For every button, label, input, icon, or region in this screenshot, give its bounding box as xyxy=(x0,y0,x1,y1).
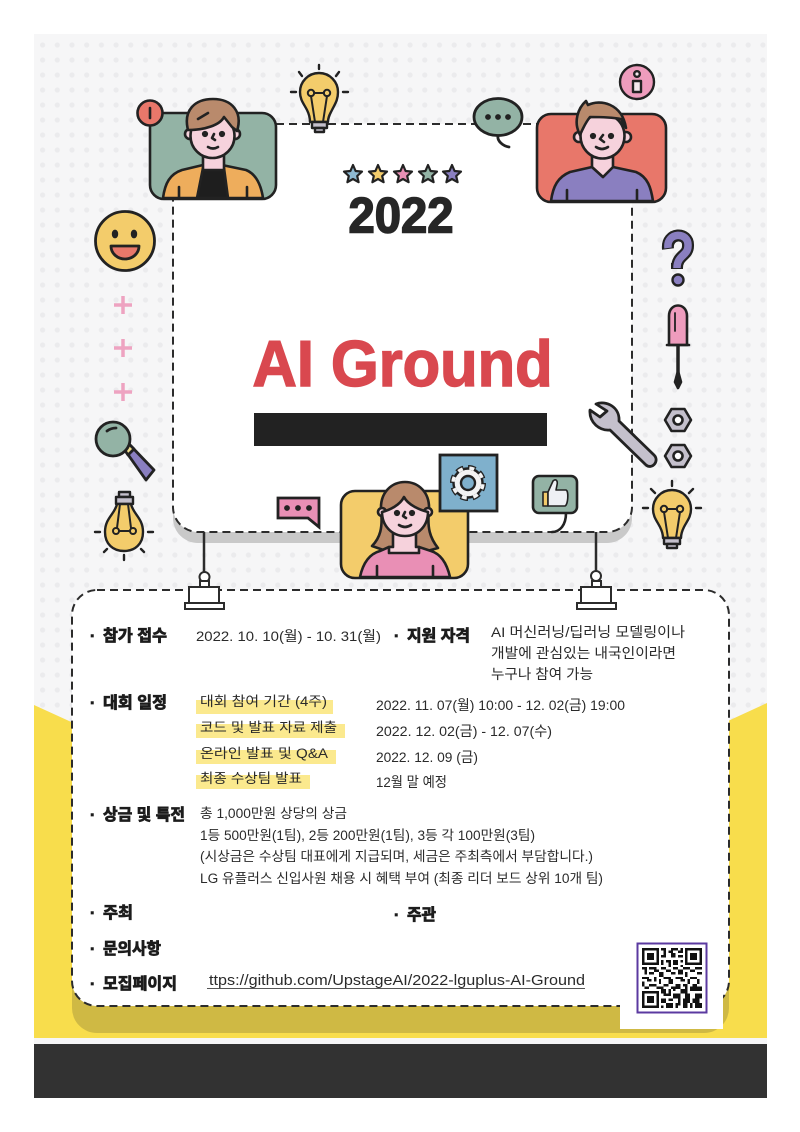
section: host: 주최 xyxy=(103,904,133,922)
section: prizes: · xyxy=(90,807,95,824)
icon: pink speech box xyxy=(278,498,319,527)
icon: question mark xyxy=(668,235,688,286)
icon: alert badge xyxy=(138,100,162,126)
section: eligibility xyxy=(394,624,685,682)
section: recruiting page xyxy=(90,972,585,993)
title: AI Ground xyxy=(252,328,553,400)
person: woman in pink xyxy=(341,482,468,578)
section: schedule: 코드 및 발표 자료 제출 xyxy=(200,720,337,735)
yellow background shape xyxy=(34,703,767,1038)
icon: smiley xyxy=(96,212,154,270)
section: schedule: 2022. 12. 02(금) - 12. 07(수) xyxy=(376,723,552,739)
icon: hex nuts xyxy=(665,409,691,467)
icons: pink plus signs xyxy=(114,296,132,401)
section: registration period: · xyxy=(90,628,95,645)
section: prizes: 총 1,000만원 상당의 상금 xyxy=(200,806,347,821)
section: recruiting page: 모집페이지 xyxy=(103,975,177,993)
clip: left hanger xyxy=(185,532,224,609)
redacted black bar xyxy=(254,413,547,446)
section: host: · xyxy=(90,905,95,922)
section: prizes: (시상금은 수상팀 대표에게 지급되며, 세금은 주최측에서 부담합니다.) xyxy=(200,849,593,864)
icon: thumbs up xyxy=(533,476,577,532)
section: recruiting page: ttps://github.com/UpstageAI/2022-lguplus-AI-Ground xyxy=(209,972,585,989)
icon: light bulb top xyxy=(291,65,348,132)
section: contact: · xyxy=(90,941,95,958)
section: eligibility: AI 머신러닝/딥러닝 모델링이나 xyxy=(491,624,685,640)
icon: magnifier xyxy=(96,422,154,480)
section: organizer: 주관 xyxy=(407,906,436,924)
section: schedule: · xyxy=(90,695,95,712)
icon: light bulb lower left xyxy=(95,492,153,560)
icon: info badge xyxy=(620,65,654,99)
section: schedule: 온라인 발표 및 Q&A xyxy=(200,746,328,761)
section: prizes: 1등 500만원(1팀), 2등 200만원(1팀), 3등 각 100만원(3팀) xyxy=(200,828,535,843)
section: schedule: 12월 말 예정 xyxy=(376,774,447,790)
clip: right hanger xyxy=(577,532,616,609)
section: host xyxy=(90,904,133,922)
person: man in purple sweater xyxy=(537,101,666,202)
QR code xyxy=(638,944,706,1012)
section: eligibility: 지원 자격 xyxy=(407,627,470,645)
icon: screwdriver xyxy=(667,306,689,388)
section: schedule: 2022. 11. 07(월) 10:00 - 12. 02(금) 19:00 xyxy=(376,697,625,713)
icon: wrench xyxy=(590,403,656,466)
section: schedule: 대회 일정 xyxy=(103,694,167,712)
section: eligibility: 개발에 관심있는 내국인이라면 xyxy=(491,645,676,661)
section: eligibility: 누구나 참여 가능 xyxy=(491,666,593,682)
lower white card xyxy=(72,590,729,1033)
section: prizes xyxy=(90,806,603,886)
section: schedule xyxy=(90,694,625,790)
section: schedule: 최종 수상팀 발표 xyxy=(200,771,302,786)
icon: light bulb right xyxy=(643,481,701,548)
section: registration period: 2022. 10. 10(월) - 10. 31(월) xyxy=(196,628,381,644)
section: registration period xyxy=(90,627,381,645)
section: schedule: 2022. 12. 09 (금) xyxy=(376,749,478,765)
year heading: 2022 xyxy=(348,188,454,244)
section: organizer xyxy=(394,906,436,924)
rating stars xyxy=(344,165,461,182)
section: eligibility: · xyxy=(394,628,399,645)
section: prizes: LG 유플러스 신입사원 채용 시 혜택 부여 (최종 리더 보드 상위 10개 팀) xyxy=(200,871,603,886)
section: recruiting page: · xyxy=(90,976,95,993)
section: registration period: 참가 접수 xyxy=(103,627,167,645)
dark footer bar xyxy=(34,1044,767,1098)
icon: gear box xyxy=(440,455,497,511)
section: contact: 문의사항 xyxy=(103,940,161,958)
section: schedule: 대회 참여 기간 (4주) xyxy=(200,694,327,709)
main white card xyxy=(173,124,632,543)
section: prizes: 상금 및 특전 xyxy=(103,806,185,824)
section: organizer: · xyxy=(394,907,399,924)
person: woman in orange jacket xyxy=(150,99,276,199)
icon: green speech bubble xyxy=(474,98,522,147)
